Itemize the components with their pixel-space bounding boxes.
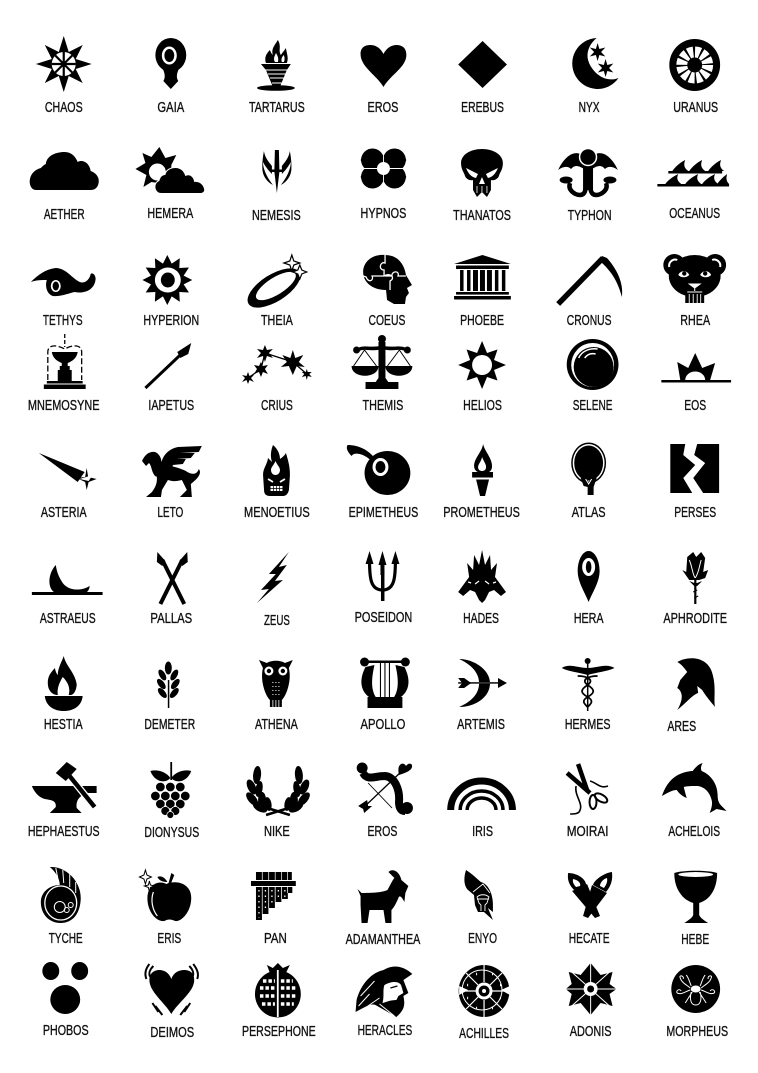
icon: hera peacock eye <box>578 551 600 602</box>
icon: tyche cornucopia <box>41 867 81 923</box>
icon: enyo helmet <box>464 870 493 920</box>
label: Chaos: CHAOS <box>45 99 83 116</box>
label: Pallas: PALLAS <box>150 610 192 627</box>
icon: mnemosyne fountain <box>44 334 86 389</box>
icon: prometheus torch <box>472 444 493 496</box>
icon: moirai scissors and thread <box>567 764 609 814</box>
label: Typhon: TYPHON <box>568 207 612 224</box>
label: Moirai: MOIRAI <box>567 823 609 840</box>
label: Perses: PERSES <box>674 504 716 521</box>
icon: phobos three circles <box>42 962 88 1014</box>
label: Theia: THEIA <box>261 312 293 329</box>
label: Hyperion: HYPERION <box>143 312 199 329</box>
icon: achilles shield <box>459 965 510 1017</box>
label: Nike: NIKE <box>264 823 290 840</box>
label: Hades: HADES <box>463 610 499 627</box>
icon: typhon <box>558 148 618 195</box>
label: Prometheus: PROMETHEUS <box>443 504 520 521</box>
label: Gaia: GAIA <box>157 99 184 116</box>
icon: apollo lyre <box>360 658 410 708</box>
icon: phoebe temple <box>454 255 511 300</box>
icon: nyx crescent and stars <box>572 38 619 89</box>
label: Hera: HERA <box>574 610 604 627</box>
label: Nemesis: NEMESIS <box>252 207 301 224</box>
icon: poseidon trident <box>366 551 399 601</box>
icon: heracles lion head <box>356 967 412 1017</box>
icon: leto griffin <box>142 446 202 497</box>
label: Athena: ATHENA <box>255 716 298 733</box>
icon: thanatos skull <box>461 149 503 197</box>
icon: perses split square <box>670 444 719 493</box>
icon: hades cerberus <box>458 550 506 603</box>
icon: hecate crossed torches <box>568 872 612 918</box>
icon: coeus puzzle head <box>363 255 412 304</box>
icon: persephone pomegranate <box>255 963 301 1018</box>
icon: pallas crossed spears <box>157 552 188 604</box>
label: Poseidon: POSEIDON <box>355 609 412 626</box>
icon: aether cloud <box>30 152 99 190</box>
icon: astraeus crescent on horizon <box>32 565 103 595</box>
label: Iris: IRIS <box>472 823 493 840</box>
icon: hemera sun and cloud <box>135 147 204 193</box>
label: Achelois: ACHELOIS <box>668 823 720 840</box>
label: Uranus: URANUS <box>673 99 718 116</box>
label: Nyx: NYX <box>579 99 600 116</box>
icon: hyperion sun eye <box>142 255 192 305</box>
label: Menoetius: MENOETIUS <box>244 504 310 521</box>
icon: dionysus grapes <box>150 762 191 818</box>
label: Demeter: DEMETER <box>144 716 195 733</box>
icon: nemesis sword and wings <box>262 150 291 193</box>
icon: uranus wheel <box>669 39 720 91</box>
icon: eros heart <box>361 45 406 87</box>
label: Tartarus: TARTARUS <box>249 99 305 116</box>
label: Hemera: HEMERA <box>147 205 193 222</box>
icon: iapetus spear <box>145 343 191 388</box>
icon: tartarus torch <box>257 40 295 91</box>
icon: helios sun <box>458 341 506 389</box>
label: Tyche: TYCHE <box>49 930 83 947</box>
label: Helios: HELIOS <box>463 397 502 414</box>
label: Artemis: ARTEMIS <box>457 716 505 733</box>
label: Coeus: COEUS <box>369 312 405 329</box>
icon: artemis bow and arrow <box>458 659 507 707</box>
icon: oceanus waves <box>657 160 729 186</box>
icon: erebus diamond <box>458 41 507 88</box>
label: Asteria: ASTERIA <box>41 504 87 521</box>
label: Oceanus: OCEANUS <box>669 205 720 222</box>
label: Persephone: PERSEPHONE <box>242 1023 316 1040</box>
label: Leto: LETO <box>157 504 183 521</box>
label: Phoebe: PHOEBE <box>460 312 504 329</box>
icon: eos sunrise <box>661 353 731 382</box>
label: Morpheus: MORPHEUS <box>666 1023 728 1040</box>
label: Dionysus: DIONYSUS <box>144 824 199 841</box>
label: Selene: SELENE <box>573 397 613 414</box>
icon: gaia <box>155 38 186 89</box>
icon: eros bow and heart arrow <box>357 762 413 814</box>
label: Themis: THEMIS <box>363 397 403 414</box>
icon: demeter wheat <box>155 662 181 708</box>
label: Eros: EROS <box>368 99 398 116</box>
icon: chaos star <box>36 36 92 92</box>
icon: ares helmet <box>677 658 715 710</box>
icon: hermes caduceus <box>562 658 615 711</box>
icon: eris apple <box>139 870 191 921</box>
label: Hebe: HEBE <box>681 931 709 948</box>
label: Tethys: TETHYS <box>43 312 83 329</box>
icon: zeus lightning bolt <box>257 552 289 603</box>
icon: morpheus dream emblem <box>671 965 720 1013</box>
icon: hebe goblet <box>674 871 717 923</box>
label: Thanatos: THANATOS <box>453 207 511 224</box>
icon: hephaestus anvil and hammer <box>32 762 97 813</box>
label: Heracles: HERACLES <box>358 1022 412 1039</box>
label: Adonis: ADONIS <box>570 1023 612 1040</box>
label: Achilles: ACHILLES <box>459 1025 509 1042</box>
icon: adonis flower <box>566 963 617 1015</box>
label: Adamanthea: ADAMANTHEA <box>346 931 420 948</box>
icon: achelois dolphin <box>662 763 727 813</box>
label: Pan: PAN <box>264 930 287 947</box>
label: Crius: CRIUS <box>261 397 293 414</box>
label: Rhea: RHEA <box>680 312 710 329</box>
label: Eos: EOS <box>684 397 706 414</box>
label: Atlas: ATLAS <box>572 504 606 521</box>
label: Hermes: HERMES <box>565 716 611 733</box>
label: Aether: AETHER <box>44 206 85 223</box>
label: Hestia: HESTIA <box>44 716 83 733</box>
label: Epimetheus: EPIMETHEUS <box>349 504 418 521</box>
icon: menoetius flaming face <box>263 445 290 496</box>
label: Enyo: ENYO <box>468 930 497 947</box>
icon: cronus scythe <box>558 256 622 304</box>
label: Deimos: DEIMOS <box>150 1024 194 1041</box>
label: Astraeus: ASTRAEUS <box>40 610 96 627</box>
label: Zeus: ZEUS <box>264 612 290 629</box>
icon: rhea lion head <box>663 254 726 303</box>
label: Aphrodite: APHRODITE <box>663 610 727 627</box>
label: Ares: ARES <box>667 718 696 735</box>
icon: atlas globe <box>571 442 606 495</box>
label: Hypnos: HYPNOS <box>361 205 406 222</box>
icon: selene moon <box>567 339 619 390</box>
icon: hestia flame and bowl <box>45 656 83 711</box>
icon: pan flute <box>251 872 296 920</box>
label: Mnemosyne: MNEMOSYNE <box>28 397 100 414</box>
label: Iapetus: IAPETUS <box>148 397 194 414</box>
label: Hecate: HECATE <box>569 930 610 947</box>
icon: athena owl <box>259 660 293 707</box>
label: Eris: ERIS <box>157 930 181 947</box>
icon: nike laurel wreath <box>244 766 312 815</box>
label: Eros: EROS <box>368 823 397 840</box>
icon: asteria comet <box>39 453 97 490</box>
icon: tethys eye <box>31 268 96 296</box>
icon: theia ring and stars <box>241 255 307 315</box>
label: Phobos: PHOBOS <box>43 1022 89 1039</box>
label: Hephaestus: HEPHAESTUS <box>28 823 100 840</box>
icon: deimos trembling heart <box>145 964 198 1015</box>
label: Erebus: EREBUS <box>461 99 504 116</box>
icon: crius constellation <box>242 345 312 384</box>
icon: iris rainbow <box>451 781 512 810</box>
icon: adamanthea goat <box>358 870 408 923</box>
icon: epimetheus orb <box>347 445 410 495</box>
icon: themis scales <box>352 335 412 389</box>
icon: aphrodite rose <box>682 552 708 604</box>
icon: hypnos flower <box>361 148 406 188</box>
label: Apollo: APOLLO <box>361 716 405 733</box>
label: Cronus: CRONUS <box>567 312 612 329</box>
